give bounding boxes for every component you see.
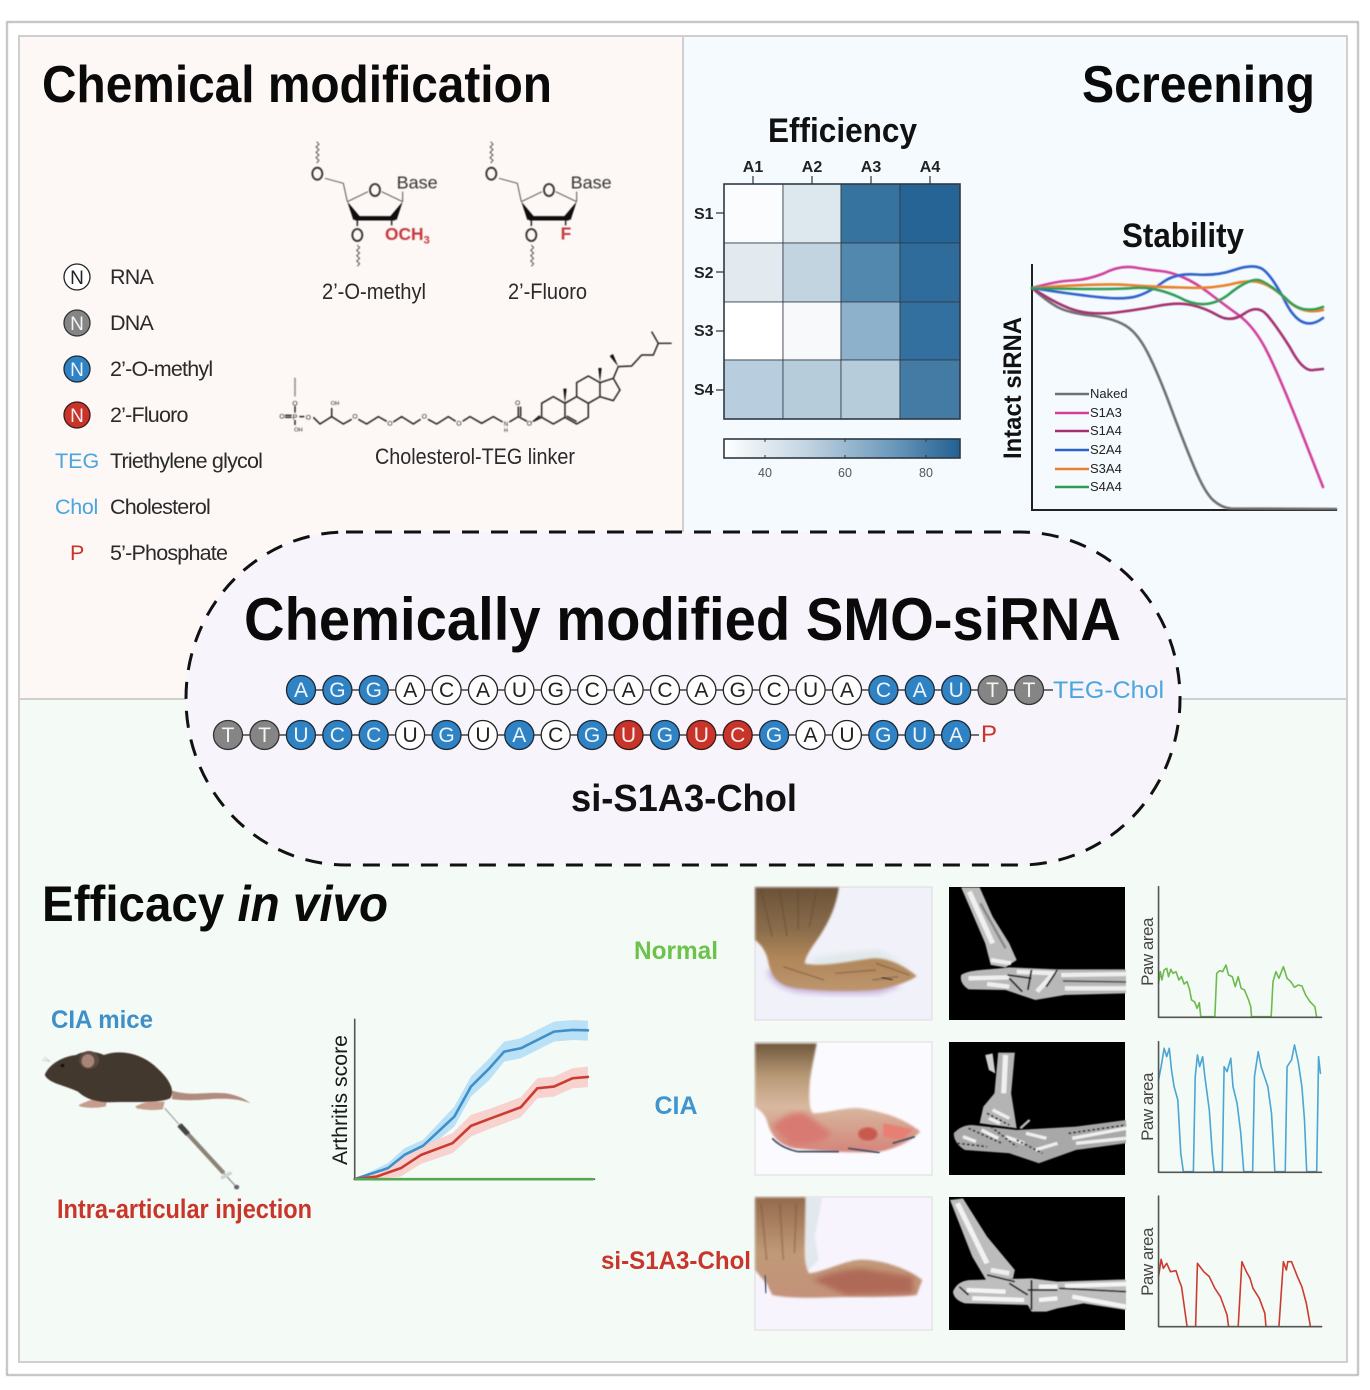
micro-CT: treated paw — [949, 1197, 1126, 1330]
icon: syringe — [165, 1108, 239, 1189]
paw-print trace: CIA — [1138, 1042, 1322, 1172]
axes — [355, 1019, 595, 1179]
legend item: 2'-Fluoro: N — [70, 406, 84, 427]
legend item: TEG: Triethylene glycol — [110, 449, 262, 473]
sequence: antisense strand: C — [330, 724, 345, 747]
sequence: antisense strand: G — [657, 724, 673, 747]
sequence: antisense strand: A — [512, 724, 526, 747]
red treated curve — [355, 1077, 588, 1179]
row labels: S2 — [694, 265, 714, 282]
chart legend: S1A3 — [1090, 405, 1122, 420]
legend item: 2'-O-methyl — [64, 356, 212, 382]
chemical structure: cholesterol-TEG linker — [279, 332, 672, 434]
label: Normal: Normal — [634, 937, 718, 965]
column labels: A2 — [802, 159, 822, 176]
sequence: antisense strand — [214, 720, 997, 750]
legend item: RNA — [64, 264, 154, 290]
sequence: sense strand — [286, 676, 1164, 704]
label: 2'-Fluoro: 2’-Fluoro — [508, 279, 587, 304]
chart legend: S1A4 — [1090, 423, 1122, 438]
chemical structure: cholesterol-TEG linker: OH — [294, 428, 303, 434]
chart legend: S2A4 — [1090, 442, 1122, 457]
sequence: sense strand: C — [439, 679, 454, 702]
legend item: P: 5’-Phosphate — [110, 541, 227, 565]
label: 2'-O-methyl: 2’-O-methyl — [322, 279, 426, 304]
sequence: sense strand: C — [585, 679, 600, 702]
label: CIA: CIA — [654, 1092, 698, 1120]
column labels: A1 — [743, 159, 763, 176]
chart legend: S3A4 — [1090, 461, 1122, 476]
stability curves — [1032, 266, 1336, 509]
row labels: S3 — [694, 323, 714, 340]
chart legend — [1055, 386, 1128, 494]
chemical structure: 2'-O-methyl sugar — [312, 142, 438, 266]
sequence: antisense strand: G — [766, 724, 782, 747]
sequence: antisense strand: U — [621, 724, 636, 747]
sequence: sense strand: C — [657, 679, 673, 702]
legend item: 2'-O-methyl: 2’-O-methyl — [110, 357, 212, 381]
sequence: antisense strand: G — [875, 724, 891, 747]
chemical structure: 2'-O-methyl sugar: Base — [397, 172, 438, 192]
sequence: sense strand: A — [694, 679, 708, 702]
photo: CIA paw — [755, 1042, 932, 1175]
chemical structure: cholesterol-TEG linker: O — [279, 414, 285, 421]
sequence: antisense strand: U — [912, 724, 927, 747]
y-axis label: Intact siRNA: Intact siRNA — [999, 317, 1027, 459]
paw-print trace: normal — [1138, 887, 1322, 1017]
mouse feet — [79, 1099, 165, 1110]
label: si-S1A3-Chol: si-S1A3-Chol — [601, 1247, 751, 1275]
legend item: Chol: Cholesterol — [110, 495, 210, 519]
pill title: Chemically modified SMO-siRNA — [244, 586, 1121, 653]
chemical structure: cholesterol-TEG linker: N — [504, 422, 508, 428]
sequence: sense strand: A — [840, 679, 854, 702]
label: CIA mice: CIA mice — [51, 1006, 153, 1034]
sequence: antisense strand: A — [803, 724, 818, 747]
paw-print trace: treated — [1138, 1196, 1322, 1327]
legend item: RNA: RNA — [110, 265, 154, 289]
sequence: antisense strand: U — [475, 724, 490, 747]
legend item: 2'-Fluoro — [64, 402, 188, 428]
colour bar — [724, 439, 960, 480]
chemical structure: cholesterol-TEG linker: O — [527, 420, 532, 427]
paw-print trace: treated: Paw area — [1138, 1227, 1157, 1296]
colour bar: 60 — [838, 466, 852, 480]
sequence: sense strand: C — [876, 679, 891, 702]
column labels — [743, 159, 940, 184]
legend item: DNA: DNA — [110, 311, 154, 335]
micro-CT: normal paw — [949, 887, 1126, 1020]
photo: normal paw — [755, 887, 932, 1020]
colour bar: 40 — [758, 466, 772, 480]
blue CIA curve — [355, 1030, 588, 1179]
sequence: antisense strand: U — [839, 724, 854, 747]
sequence: antisense strand: A — [949, 724, 963, 747]
sequence: antisense strand: T — [222, 724, 235, 747]
sequence: antisense strand: U — [293, 724, 308, 747]
sequence: sense strand: T — [986, 679, 999, 702]
chart axes — [1032, 264, 1337, 510]
chemical structure: cholesterol-TEG linker: O — [306, 414, 311, 421]
chemical structure: cholesterol-TEG linker: OH — [331, 401, 339, 407]
sequence: antisense strand: C — [548, 724, 563, 747]
sequence: sense strand: G — [366, 679, 382, 702]
heading: Stability: Stability — [1122, 217, 1244, 255]
sequence: antisense strand: G — [438, 724, 455, 747]
chemical structure: 2'-O-methyl sugar: OCH — [385, 224, 424, 244]
label: Intra-articular injection: Intra-articular injection — [57, 1194, 312, 1224]
column labels: A4 — [920, 159, 940, 176]
row labels: S1 — [694, 206, 714, 223]
legend item: P: P — [70, 541, 84, 565]
sequence: antisense strand: U — [403, 724, 418, 747]
legend: nucleotide key — [55, 264, 262, 565]
panel: efficacy in vivo background — [19, 699, 1347, 1362]
sequence: sense strand: A — [294, 679, 308, 702]
sequence: antisense strand: C — [366, 724, 381, 747]
chemical structure: cholesterol-TEG linker: O — [292, 400, 298, 407]
sequence: sense strand: C — [767, 679, 782, 702]
paw-print trace: normal: Paw area — [1138, 917, 1157, 986]
chemical structure: 2'-Fluoro sugar — [486, 142, 612, 266]
confidence bands — [355, 1020, 588, 1179]
sequence: sense strand: U — [512, 679, 527, 702]
label: Cholesterol-TEG linker: Cholesterol-TEG linker — [375, 444, 575, 469]
sequence: sense strand: G — [548, 679, 564, 702]
line chart: arthritis score — [328, 1019, 595, 1179]
sequence: sense strand: A — [403, 679, 417, 702]
green normal line — [355, 1178, 593, 1180]
panel: chemical modification background — [19, 36, 683, 699]
sequence: antisense strand: C — [730, 724, 745, 747]
legend item: RNA: N — [70, 268, 84, 289]
chart legend: S4A4 — [1090, 479, 1122, 494]
chemical structure: 2'-Fluoro sugar: F — [561, 223, 571, 243]
mouse tail — [172, 1091, 250, 1103]
sequence: sense strand: G — [730, 679, 746, 702]
chemical structure: cholesterol-TEG linker: O — [515, 400, 520, 407]
legend item: 2'-O-methyl: N — [70, 360, 84, 381]
chemical structure: cholesterol-TEG linker: O — [456, 420, 462, 427]
heatmap: efficiency — [694, 159, 960, 480]
compound name: si-S1A3-Chol — [571, 778, 797, 820]
dashed pill outline — [186, 532, 1180, 865]
sequence: sense strand: TEG-Chol — [1053, 677, 1164, 704]
y-axis label: Arthritis score: Arthritis score — [328, 1035, 352, 1165]
sequence: sense strand: A — [622, 679, 636, 702]
title: Chemical modification: Chemical modification — [42, 56, 552, 114]
legend item: DNA: N — [70, 314, 84, 335]
sequence: antisense strand: G — [584, 724, 600, 747]
sequence: antisense strand: U — [694, 724, 709, 747]
legend item: 2'-Fluoro: 2’-Fluoro — [110, 403, 188, 427]
chemical structure: cholesterol-TEG linker: O — [352, 414, 358, 421]
chemical structure: cholesterol-TEG linker: O — [422, 414, 427, 421]
chemical structure: cholesterol-TEG linker: O — [387, 420, 393, 427]
sequence: sense strand: T — [1023, 679, 1036, 702]
chemical structure: cholesterol-TEG linker: H — [504, 428, 508, 434]
sequence: sense strand: U — [949, 679, 964, 702]
row labels — [694, 206, 724, 399]
heatmap cells — [724, 184, 960, 419]
sequence: sense strand: G — [329, 679, 346, 702]
photo: treated paw — [755, 1197, 932, 1330]
chemical structure: cholesterol-TEG linker: P — [293, 412, 298, 421]
legend item: DNA — [64, 310, 154, 336]
legend item: TEG: TEG — [55, 449, 99, 473]
title: Screening: Screening — [1082, 56, 1315, 114]
panel: screening background — [683, 36, 1347, 699]
chemical structure: 2'-Fluoro sugar: Base — [571, 172, 612, 192]
sequence: antisense strand: P — [981, 721, 997, 748]
chemical structure: 2'-O-methyl sugar: 3 — [424, 234, 430, 246]
title: Efficacy in vivo: Efficacy in vivo — [42, 876, 388, 932]
row labels: S4 — [694, 382, 714, 399]
icon: mouse with syringe — [42, 1051, 250, 1189]
sequence: antisense strand: T — [258, 724, 271, 747]
heading: Efficiency: Efficiency — [768, 112, 917, 150]
chart legend: Naked — [1090, 386, 1128, 401]
paw-print trace: CIA: Paw area — [1138, 1072, 1157, 1141]
legend item: Chol: Chol — [55, 495, 98, 519]
micro-CT: CIA paw — [949, 1042, 1126, 1175]
colour bar: 80 — [919, 466, 933, 480]
sequence: sense strand: U — [803, 679, 818, 702]
sequence: sense strand: A — [913, 679, 927, 702]
legend item: Chol — [55, 495, 210, 519]
sequence: sense strand: A — [476, 679, 490, 702]
column labels: A3 — [861, 159, 881, 176]
central pill: chemically modified SMO-siRNA — [186, 532, 1180, 865]
mouse body — [45, 1052, 172, 1102]
line chart: stability — [999, 264, 1337, 510]
